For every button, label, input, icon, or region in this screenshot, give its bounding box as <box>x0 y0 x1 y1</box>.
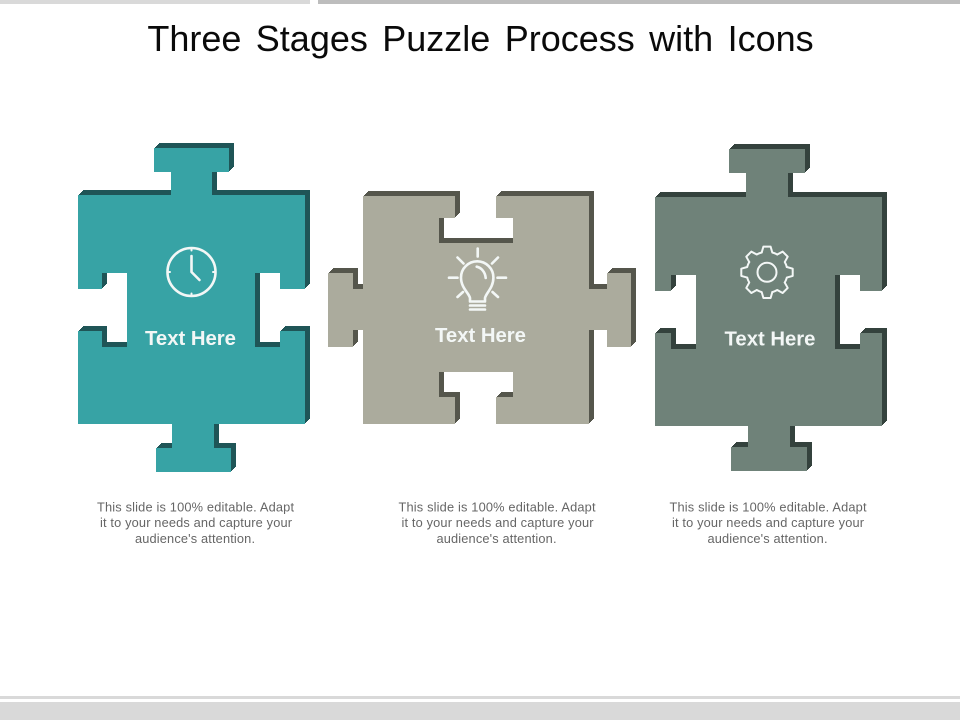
text block: description 3: This slide is 100% editable. Adapt <box>670 500 867 514</box>
panel: teal puzzle piece <box>78 143 310 472</box>
piece face: teal <box>78 148 305 472</box>
label: text here 2: Text Here <box>435 325 526 347</box>
text block: description 3: audience's attention. <box>708 531 828 546</box>
title: Three Stages Puzzle Process with Icons <box>147 18 814 59</box>
top bar <box>0 0 960 4</box>
icon: light bulb <box>449 248 506 310</box>
text block: description 1: audience's attention. <box>135 531 255 546</box>
piece face: grey <box>328 196 631 424</box>
label: text here 3: Text Here <box>725 328 815 350</box>
text block: description 3: it to your needs and capture your <box>672 515 865 530</box>
text block: description 2: audience's attention. <box>436 531 556 546</box>
piece face: slate <box>655 149 882 471</box>
text block: description 2: it to your needs and capture your <box>402 515 594 530</box>
text block: description 3 <box>670 500 867 546</box>
text block: description 2: This slide is 100% editable. Adapt <box>398 500 596 514</box>
panel: grey puzzle piece <box>328 191 636 424</box>
label: text here 1: Text Here <box>145 328 236 350</box>
piece extrusion: teal <box>79 143 310 471</box>
text block: description 1: This slide is 100% editable. Adapt <box>97 500 294 514</box>
text block: description 1: it to your needs and capture your <box>100 515 293 530</box>
icon: gear <box>741 247 793 298</box>
panel: slate puzzle piece <box>655 144 887 471</box>
text block: description 2 <box>398 500 596 546</box>
piece extrusion: grey <box>329 191 636 423</box>
text block: description 1 <box>97 500 294 546</box>
bottom bars <box>0 696 960 720</box>
piece extrusion: slate <box>656 144 887 470</box>
icon: clock <box>168 248 216 296</box>
